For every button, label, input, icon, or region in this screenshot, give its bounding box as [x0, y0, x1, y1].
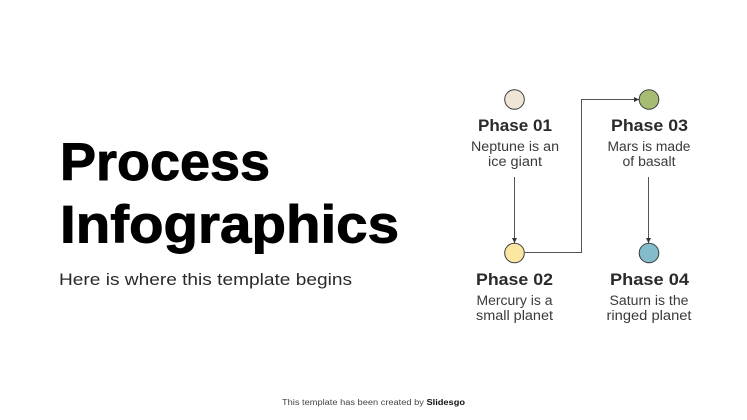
icon: beige circle [505, 90, 524, 109]
phase 01 heading: Phase 01 [478, 116, 552, 135]
phase 02 [476, 243, 553, 323]
subtitle: Here is where this template begins [59, 270, 352, 289]
footer credit: This template has been created by Slidesgo [282, 398, 465, 407]
phase 03 heading: Phase 03 [611, 116, 688, 135]
icon: yellow circle [505, 243, 524, 263]
phase 01 text: ice giant [488, 154, 542, 169]
phase 03 text: Mars is made [608, 139, 690, 154]
icon: green circle [639, 90, 659, 109]
phase 04 [606, 243, 692, 323]
icon: blue circle [639, 243, 659, 263]
phase 02 text: Mercury is a [476, 293, 553, 308]
phase 03 text [608, 139, 690, 169]
phase 02 text [476, 293, 553, 323]
title [60, 133, 399, 254]
arrow: phase 02 to phase 03 [525, 100, 639, 252]
arrow: phase 03 to phase 04 [648, 177, 650, 243]
phase 04 text: Saturn is the [610, 293, 688, 308]
phase 03 text: of basalt [622, 154, 676, 169]
arrow: phase 01 to phase 02 [514, 177, 516, 243]
phase 01 [471, 90, 559, 169]
phase 03 [608, 90, 690, 169]
phase 02 text: small planet [476, 308, 553, 323]
phase 02 heading: Phase 02 [476, 270, 553, 289]
phase 01 text: Neptune is an [471, 139, 559, 154]
title: Infographics [60, 196, 399, 254]
title: Process [60, 133, 270, 192]
phase 01 text [471, 139, 559, 169]
phase 04 heading: Phase 04 [610, 270, 690, 289]
phase 04 text: ringed planet [606, 308, 692, 323]
phase 04 text [606, 293, 692, 323]
